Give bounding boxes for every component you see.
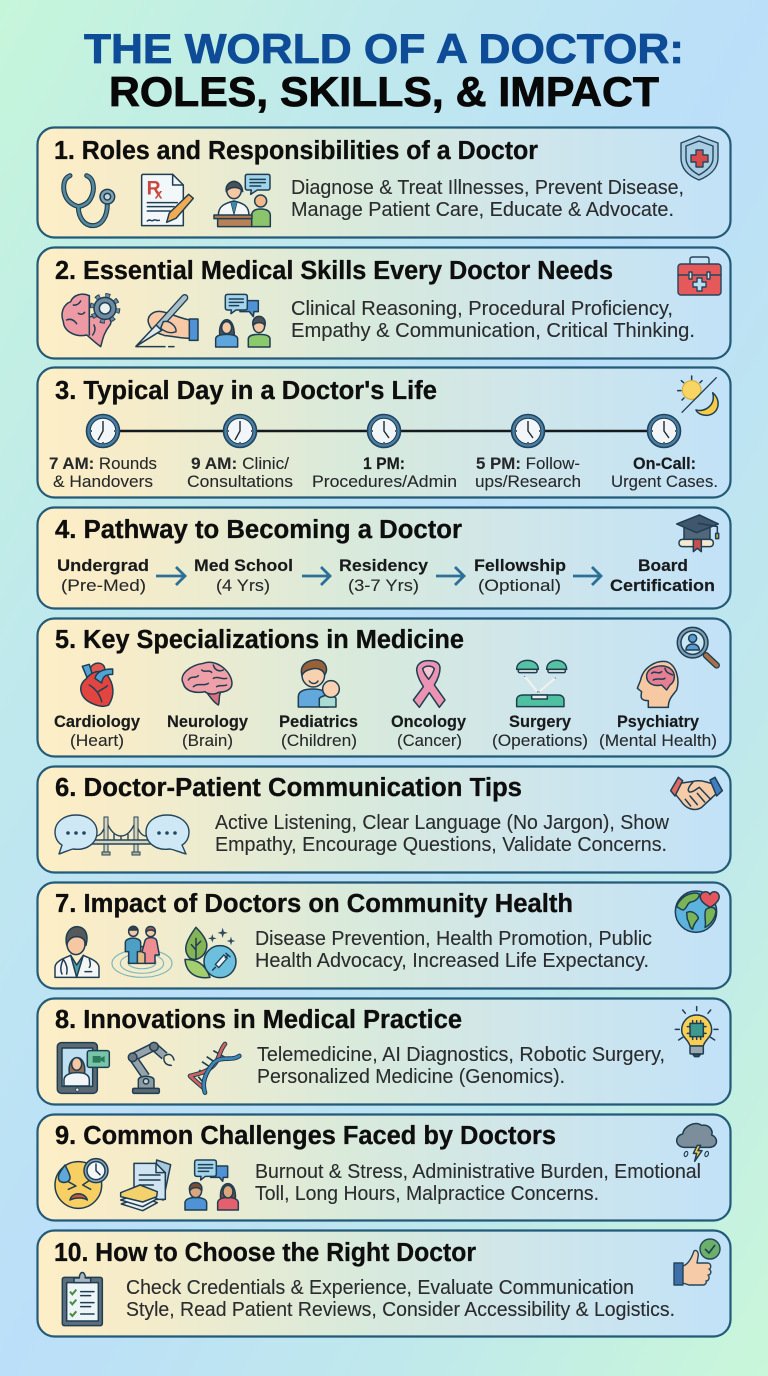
body text: section 9: Toll, Long Hours, Malpractice Concerns.	[255, 1183, 599, 1205]
pathway steps: Residency	[339, 556, 429, 575]
body text: section 7: Disease Prevention, Health Promotion, Public	[255, 928, 652, 950]
arrow: step 3 to 4	[436, 567, 464, 585]
icon: globe with heart	[675, 891, 719, 932]
timeline labels: 9 AM: Clinic/	[191, 454, 289, 473]
icon: storm cloud	[677, 1124, 716, 1161]
icon: hand with scalpel	[136, 298, 198, 347]
icon: two people chatting	[216, 294, 270, 347]
heading: section 1: 1. Roles and Responsibilities of a Doctor	[54, 137, 538, 165]
pathway steps: Board	[638, 556, 688, 575]
panel: community impact	[38, 882, 730, 988]
icon: two people talking	[185, 1160, 238, 1210]
specialization: surgery: Surgery	[509, 712, 572, 731]
body text: section 6	[215, 812, 670, 856]
specialization: cardiology: Cardiology	[54, 712, 141, 731]
icon: magnifier with person	[677, 627, 717, 665]
icon: robotic arm	[128, 1042, 174, 1093]
icon: leaf and vaccine	[185, 927, 236, 978]
pathway steps: Undergrad	[57, 556, 149, 575]
specialization: neurology	[167, 662, 249, 750]
body text: section 9: Burnout & Stress, Administrative Burden, Emotional	[255, 1161, 701, 1183]
icon: lightbulb with chip	[675, 1007, 718, 1057]
specialization: neurology: (Brain)	[182, 731, 233, 750]
title	[84, 25, 684, 115]
icon: sun and moon	[678, 376, 718, 415]
icon: family with ripples	[112, 926, 172, 977]
pathway steps: Certification	[610, 576, 715, 595]
timeline	[86, 414, 680, 448]
heading: section 4: 4. Pathway to Becoming a Doctor	[55, 516, 462, 544]
icon: prescription pad: R	[147, 178, 161, 199]
pathway steps: Fellowship	[474, 556, 566, 575]
clock: on-call	[648, 414, 680, 448]
body text: section 8: Telemedicine, AI Diagnostics, Robotic Surgery,	[257, 1044, 665, 1066]
specialization: cardiology	[54, 663, 141, 750]
body text: section 7	[255, 928, 652, 972]
timeline labels	[49, 454, 718, 491]
body text: section 6: Active Listening, Clear Language (No Jargon), Show	[215, 812, 670, 834]
body text: section 9	[255, 1161, 701, 1205]
pathway steps: (Optional)	[478, 576, 561, 595]
specialization: oncology: Oncology	[391, 712, 467, 731]
icon: DNA helix	[190, 1044, 239, 1093]
specialization: pediatrics: Pediatrics	[279, 712, 358, 731]
pathway steps: (4 Yrs)	[216, 576, 270, 595]
body text: section 10: Check Credentials & Experience, Evaluate Communication	[126, 1277, 634, 1299]
specialization: neurology: Neurology	[167, 712, 249, 731]
heading: section 7: 7. Impact of Doctors on Community Health	[55, 890, 573, 918]
arrow: step 2 to 3	[302, 567, 330, 585]
icon: clipboard checklist	[62, 1272, 102, 1326]
body text: section 2: Clinical Reasoning, Procedural Proficiency,	[291, 298, 673, 320]
heading: section 3: 3. Typical Day in a Doctor's Life	[55, 377, 437, 405]
heading: section 10: 10. How to Choose the Right Doctor	[54, 1239, 476, 1267]
heading: section 2: 2. Essential Medical Skills Every Doctor Needs	[55, 257, 613, 285]
body text: section 1: Diagnose & Treat Illnesses, Prevent Disease,	[291, 177, 684, 199]
icon: doctor portrait	[55, 927, 99, 977]
icon: prescription pad	[142, 174, 193, 226]
icon: graduation cap	[677, 515, 719, 552]
icon: paperwork stack	[121, 1160, 171, 1211]
timeline labels: 7 AM: Rounds	[49, 454, 157, 473]
specialization: surgery	[492, 660, 588, 750]
pathway steps: Med School	[194, 556, 293, 575]
specialization: surgery: (Operations)	[492, 731, 588, 750]
clock: 1 PM	[368, 414, 400, 448]
panel: challenges	[38, 1114, 730, 1220]
timeline labels: & Handovers	[53, 472, 153, 491]
body text: section 10: Style, Read Patient Reviews, Consider Accessibility & Logistics.	[126, 1299, 675, 1321]
panel: innovations	[38, 998, 730, 1104]
heading: section 8: 8. Innovations in Medical Practice	[55, 1006, 462, 1034]
icon: doctor with patient	[214, 174, 270, 227]
timeline labels: Procedures/Admin	[312, 472, 457, 491]
clock: 7 AM	[86, 414, 120, 448]
body text: section 10	[126, 1277, 675, 1321]
body text: section 1	[291, 177, 684, 221]
timeline labels: Urgent Cases.	[611, 472, 718, 491]
icon: stethoscope	[64, 176, 115, 226]
heading: section 9: 9. Common Challenges Faced by Doctors	[55, 1122, 556, 1150]
icon: thumbs up with check	[674, 1239, 720, 1285]
icon: handshake	[671, 777, 722, 809]
panel: specializations	[38, 618, 730, 756]
arrow: step 4 to 5	[573, 567, 601, 585]
pathway steps	[57, 556, 715, 595]
clock: 5 PM	[512, 414, 544, 448]
timeline labels: On-Call:	[633, 454, 696, 473]
timeline labels: ups/Research	[475, 472, 581, 491]
icon: stressed face with clock	[55, 1159, 108, 1208]
icon: brain and gear	[62, 294, 118, 347]
heading: section 6: 6. Doctor-Patient Communication Tips	[55, 774, 522, 802]
heading: section 5: 5. Key Specializations in Medicine	[55, 626, 464, 654]
panel: pathway	[38, 508, 730, 608]
specialization: pediatrics: (Children)	[281, 731, 357, 750]
title: ROLES, SKILLS, & IMPACT	[109, 68, 659, 115]
specialization: oncology	[391, 661, 467, 750]
body text: section 8: Personalized Medicine (Genomics).	[257, 1066, 565, 1088]
specialization: psychiatry: (Mental Health)	[599, 731, 717, 750]
specialization: cardiology: (Heart)	[70, 731, 124, 750]
timeline labels: 1 PM:	[363, 454, 405, 473]
specialization: psychiatry	[599, 661, 717, 750]
body text: section 1: Manage Patient Care, Educate & Advocate.	[291, 199, 674, 221]
pathway steps: (Pre-Med)	[61, 576, 146, 595]
timeline labels: 5 PM: Follow-	[476, 454, 580, 473]
arrow: step 1 to 2	[156, 567, 185, 585]
body text: section 6: Empathy, Encourage Questions, Validate Concerns.	[215, 834, 667, 856]
panel: communication tips	[38, 766, 730, 872]
clock: 9 AM	[224, 414, 256, 448]
body text: section 2	[291, 298, 695, 342]
specialization: oncology: (Cancer)	[397, 731, 462, 750]
panel: choosing a doctor	[38, 1230, 730, 1336]
body text: section 2: Empathy & Communication, Critical Thinking.	[291, 320, 695, 342]
icon: speech bubbles joined by a bridge	[55, 815, 189, 855]
icon: shield	[681, 136, 718, 180]
icon: medical toolbox	[678, 257, 721, 295]
timeline labels: Consultations	[187, 472, 293, 491]
panel: roles and responsibilities	[38, 128, 730, 238]
panel: typical day	[38, 368, 730, 498]
title: THE WORLD OF A DOCTOR:	[84, 25, 684, 72]
icon: telemedicine tablet	[57, 1043, 109, 1093]
specialization: pediatrics	[279, 660, 358, 750]
specialization: psychiatry: Psychiatry	[617, 712, 700, 731]
body text: section 7: Health Advocacy, Increased Life Expectancy.	[255, 950, 649, 972]
pathway steps: (3-7 Yrs)	[348, 576, 419, 595]
body text: section 8	[257, 1044, 665, 1088]
panel: essential skills	[38, 248, 730, 358]
icon: prescription pad: x	[155, 185, 163, 201]
